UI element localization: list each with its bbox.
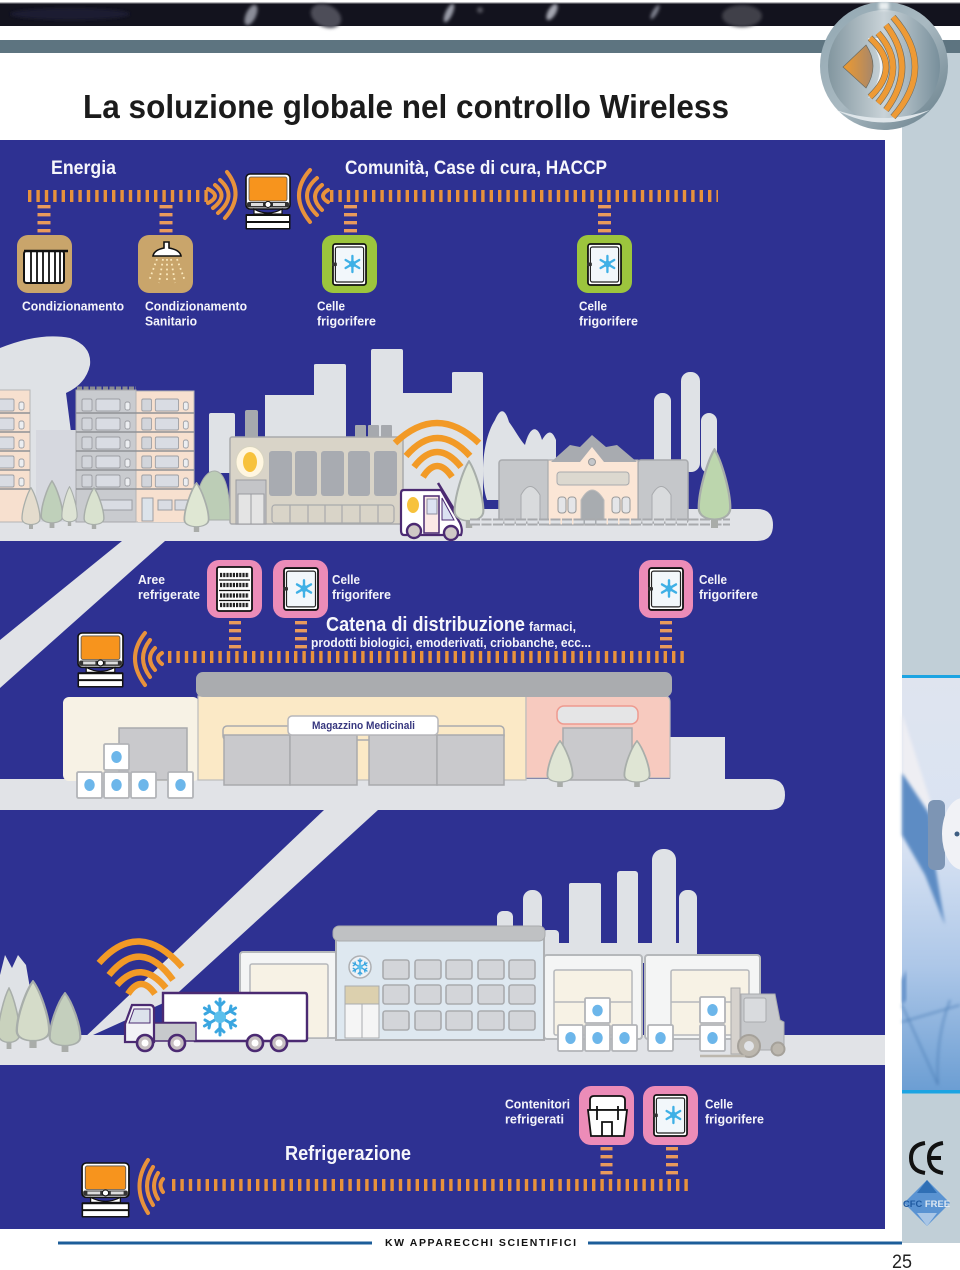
label: Contenitori refrigerati xyxy=(505,1096,570,1126)
label: Condizionamento Sanitario: Sanitario xyxy=(145,314,197,328)
wireless signal: van xyxy=(395,423,479,477)
label: Celle frigorifere 1: frigorifere xyxy=(317,314,376,328)
sidebar photo xyxy=(902,675,960,1094)
icon: refrigerated shelves xyxy=(207,560,262,618)
footer rule right xyxy=(588,1242,902,1244)
label: Celle frigorifere 2: frigorifere xyxy=(579,314,638,328)
icon: refrigerated container xyxy=(579,1086,634,1145)
label: Celle frigorifere 4 xyxy=(699,572,758,602)
connector stubs: middle row xyxy=(229,621,672,648)
city skyline: top xyxy=(0,336,717,510)
wireless bar: bottom row xyxy=(140,1160,689,1213)
icon: cold room green 2 xyxy=(577,235,632,293)
top photo band xyxy=(0,0,960,33)
footer text: KW APPARECCHI SCIENTIFICI xyxy=(385,1237,576,1249)
low warehouses xyxy=(240,952,760,1039)
heading: Comunità: Comunità, Case di cura, HACCP xyxy=(345,158,607,179)
monitor: middle xyxy=(77,632,124,688)
warehouse: Magazzino Medicinali xyxy=(63,672,672,785)
monitor: bottom xyxy=(81,1162,130,1218)
CFC free badge: CFC FREE xyxy=(903,1199,950,1210)
factory with plate logo xyxy=(230,410,403,524)
logo sphere with wireless signal xyxy=(820,2,948,130)
label: Contenitori refrigerati: Contenitori xyxy=(505,1096,570,1112)
footer rule left xyxy=(58,1242,372,1244)
CE mark xyxy=(911,1143,943,1173)
forklift xyxy=(700,988,784,1057)
trees: warehouse xyxy=(547,741,650,787)
connector stubs: bottom row xyxy=(600,1147,678,1174)
label: Celle frigorifere 2 xyxy=(579,298,638,328)
label: Celle frigorifere 4: frigorifere xyxy=(699,587,758,602)
apartment buildings xyxy=(0,388,194,522)
main blue panel xyxy=(0,140,885,1229)
header band xyxy=(0,40,960,53)
road: middle street xyxy=(0,737,785,1040)
boxes: bottom xyxy=(558,997,725,1051)
icon: radiator xyxy=(17,235,72,293)
label: Celle frigorifere 3 xyxy=(332,572,391,602)
road: bottom street xyxy=(0,1035,885,1065)
heading: Catena di distribuzione: farmaci, xyxy=(529,619,576,634)
tree: station right xyxy=(699,449,730,528)
label: Celle frigorifere 1: Celle xyxy=(317,298,345,314)
CFC free badge xyxy=(903,1180,950,1226)
trees: bottom left xyxy=(0,981,80,1052)
label: Condizionamento Sanitario xyxy=(145,298,247,328)
trees: top street left xyxy=(22,471,230,532)
label: Aree refrigerate: Aree xyxy=(138,572,165,587)
icon: cold room pink 3 xyxy=(643,1086,698,1145)
heading: Refrigerazione: Refrigerazione xyxy=(285,1143,411,1165)
cold storage main building xyxy=(333,926,545,1040)
icon: cold room pink 2 xyxy=(639,560,693,618)
station building xyxy=(470,435,730,525)
label: Celle frigorifere 5 xyxy=(705,1096,764,1126)
connector stubs: top row xyxy=(38,205,611,232)
title: La soluzione globale nel controllo Wireless xyxy=(83,88,729,125)
wireless bar: middle row xyxy=(135,633,687,685)
refrigerated truck xyxy=(125,993,307,1051)
monitor: top xyxy=(245,173,291,230)
city skyline: bottom xyxy=(0,849,697,1040)
label: Celle frigorifere 2: Celle xyxy=(579,298,607,314)
heading: Energia: Energia xyxy=(51,158,116,179)
heading: Catena di distribuzione: Catena di distribuzione xyxy=(326,614,525,636)
label: Aree refrigerate xyxy=(138,572,200,602)
icon: shower xyxy=(138,235,193,293)
road: top street xyxy=(0,509,773,688)
warehouse: Magazzino Medicinali: Magazzino Medicinali xyxy=(312,720,415,732)
right sidebar xyxy=(902,53,960,1243)
label: Contenitori refrigerati: refrigerati xyxy=(505,1112,564,1126)
wireless bar: top row xyxy=(28,170,718,222)
boxes: warehouse xyxy=(77,744,193,798)
tree: by van xyxy=(455,461,483,528)
label: Celle frigorifere 5: frigorifere xyxy=(705,1112,764,1126)
icon: cold room pink 1 xyxy=(273,560,328,618)
heading: Catena di distribuzione xyxy=(311,614,591,650)
icon: cold room green 1 xyxy=(322,235,377,293)
label: Celle frigorifere 1 xyxy=(317,298,376,328)
label: Celle frigorifere 5: Celle xyxy=(705,1096,733,1112)
label: Celle frigorifere 4: Celle xyxy=(699,572,727,587)
label: Condizionamento Sanitario: Condizionamento xyxy=(145,298,247,314)
label: Celle frigorifere 3: frigorifere xyxy=(332,587,391,602)
label: Aree refrigerate: refrigerate xyxy=(138,587,200,602)
wireless signal: truck xyxy=(99,941,182,994)
label: Celle frigorifere 3: Celle xyxy=(332,572,360,587)
heading: Catena di distribuzione: prodotti biologici, emoderivati, criobanche, ecc... xyxy=(311,635,591,650)
label: Condizionamento: Condizionamento xyxy=(22,298,124,314)
delivery van xyxy=(401,483,462,540)
